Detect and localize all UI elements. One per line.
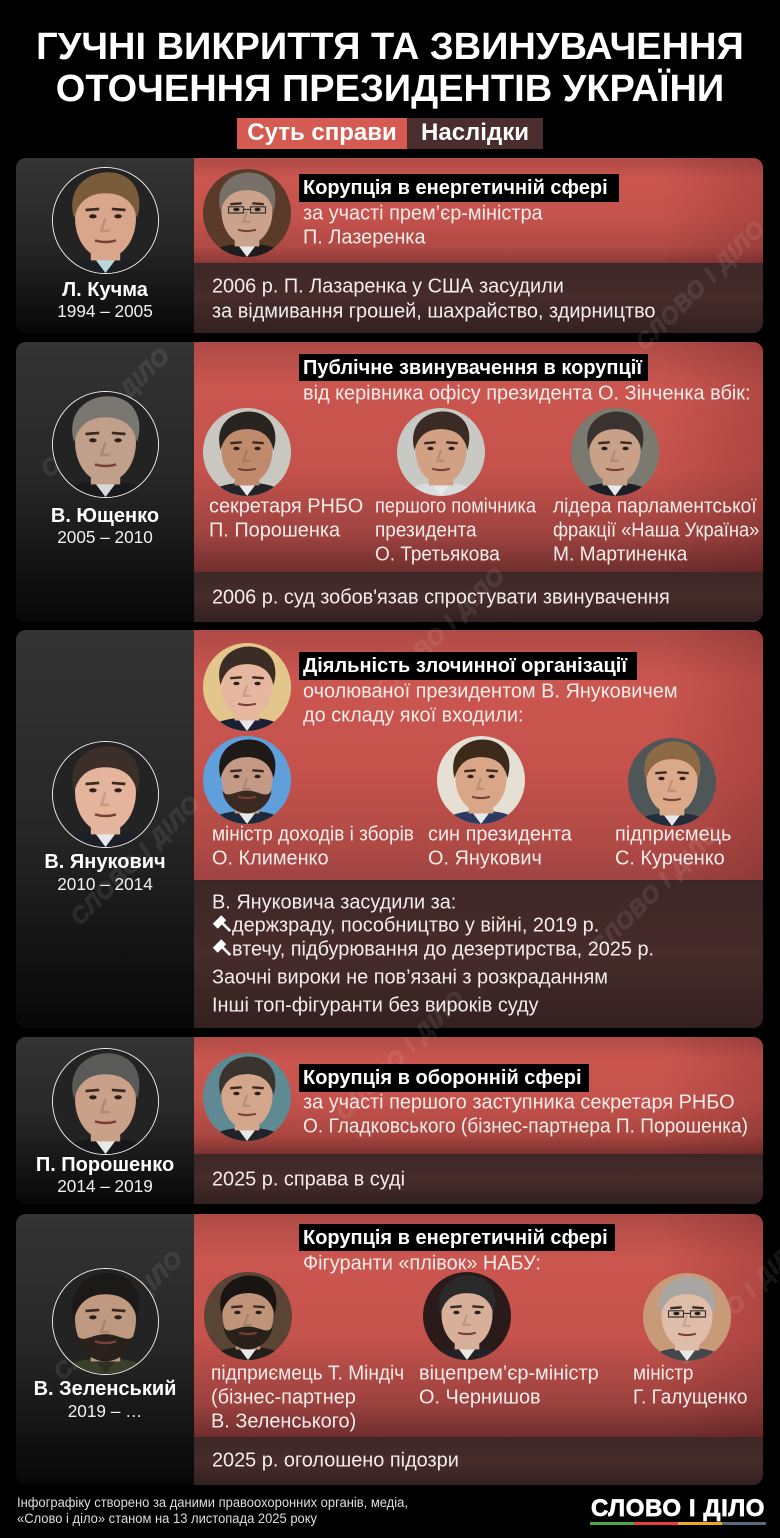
- figure: Галущенко line 2: Г. Галущенко: [633, 1386, 747, 1408]
- portrait: О. Клименко: [203, 736, 291, 824]
- footer source note: [17, 1495, 408, 1526]
- footer source note: Інфографіку створено за даними правоохоронних органів, медіа,: [17, 1495, 408, 1510]
- title: ОТОЧЕННЯ ПРЕЗИДЕНТІВ УКРАЇНИ: [56, 68, 724, 110]
- watermark: СЛОВО І ДІЛО: [330, 985, 470, 1125]
- portrait: О. Гладковський: [203, 1053, 291, 1141]
- consequence: Порошенко: 2025 р. справа в суді: [212, 1168, 405, 1190]
- figure: Курченко line 1: підприємець: [615, 824, 731, 846]
- figure: Порошенко line 2: П. Порошенка: [209, 520, 340, 542]
- case heading: Ющенко: Публічне звинувачення в корупції: [303, 356, 642, 378]
- years: Ющенко: 2005 – 2010: [57, 527, 153, 547]
- portrait: Л. Кучма: [52, 167, 159, 274]
- figure: Міндіч line 1: підприємець Т. Міндіч: [211, 1362, 404, 1384]
- case heading: Порошенко: Корупція в оборонній сфері: [303, 1067, 582, 1089]
- footer source note: «Слово і діло» станом на 13 листопада 2025 року: [17, 1511, 317, 1526]
- case text: Лазаренко: П. Лазеренка: [303, 226, 426, 248]
- legend item: наслідки: [407, 118, 543, 149]
- legend item: суть справи: Суть справи: [247, 119, 397, 146]
- name: Л. Кучма: Л. Кучма: [62, 279, 148, 301]
- consequence: Зеленський: 2025 р. оголошено підозри: [212, 1450, 459, 1472]
- portrait: П. Лазаренко: [203, 169, 291, 257]
- figure: О. Янукович line 2: О. Янукович: [428, 848, 542, 870]
- name: В. Ющенко: В. Ющенко: [51, 505, 159, 527]
- case heading: Кучма: Корупція в енергетичній сфері: [303, 177, 608, 199]
- consequence: інші фігуранти: Інші топ-фігуранти без вироків суду: [212, 994, 539, 1016]
- figure: Чернишов line 1: віцепрем’єр-міністр: [419, 1362, 599, 1384]
- portrait: О. Чернишов: [423, 1272, 511, 1360]
- figure: Чернишов line 2: О. Чернишов: [419, 1386, 541, 1408]
- watermark: СЛОВО І ДІЛО: [65, 790, 205, 930]
- portrait: П. Порошенко main: [52, 1048, 159, 1155]
- years: Зеленський: 2019 – …: [68, 1401, 142, 1421]
- watermark: СЛОВО І ДІЛО: [370, 562, 510, 702]
- watermark: СЛОВО І ДІЛО: [48, 1245, 188, 1385]
- figure: Клименко line 1: міністр доходів і зборів: [212, 824, 414, 846]
- name: В. Янукович: В. Янукович: [44, 851, 166, 873]
- consequence: державна зрада: держзраду, пособництво у війні, 2019 р.: [232, 914, 599, 936]
- figure: Курченко line 2: С. Курченко: [615, 848, 725, 870]
- figure: Мартиненко line 1: лідера парламентської: [553, 496, 757, 518]
- icon: gavel: [212, 915, 232, 932]
- figure: Порошенко line 1: секретаря РНБО: [209, 496, 363, 518]
- case text: Кучма: за участі прем’єр-міністра: [303, 202, 543, 224]
- consequence: заочні вироки: Заочні вироки не пов’язані з розкраданням: [212, 966, 608, 988]
- legend: [237, 118, 543, 149]
- portrait: В. Ющенко: [52, 391, 159, 498]
- case text: Порошенко line 2: О. Гладковського (бізнес-партнера П. Порошенка): [303, 1116, 748, 1138]
- portrait: В. Зеленський: [52, 1268, 159, 1375]
- case text: Зеленський: Фігуранти «плівок» НАБУ:: [303, 1252, 541, 1274]
- case heading: Зеленський: Корупція в енергетичній сфері: [303, 1226, 608, 1248]
- case text: Порошенко line 1: за участі першого заступника секретаря РНБО: [303, 1092, 735, 1114]
- figure: Галущенко line 1: міністр: [633, 1362, 693, 1384]
- portrait: В. Янукович: [52, 741, 159, 848]
- figure: О. Янукович line 1: син президента: [428, 824, 572, 846]
- watermark: СЛОВО І ДІЛО: [630, 215, 770, 355]
- portrait: Т. Міндіч: [204, 1272, 292, 1360]
- panel: Зеленський background: [16, 1214, 763, 1485]
- figure: Третьяков line 2: президента: [375, 520, 477, 542]
- watermark: СЛОВО І ДІЛО: [585, 820, 725, 960]
- legend item: наслідки: Наслідки: [421, 119, 529, 146]
- consequence: втеча: втечу, підбурювання до дезертирства, 2025 р.: [232, 938, 654, 960]
- name: В. Зеленський: В. Зеленський: [34, 1378, 176, 1400]
- case text: Ющенко: від керівника офісу президента О. Зінченка вбік:: [303, 382, 751, 404]
- figure: Третьяков line 1: першого помічника: [375, 496, 536, 518]
- title: ГУЧНІ ВИКРИТТЯ ТА ЗВИНУВАЧЕННЯ: [36, 26, 744, 68]
- panel: Порошенко background: [16, 1037, 763, 1204]
- title: [36, 26, 744, 110]
- figure: Міндіч line 2: (бізнес-партнер: [211, 1386, 356, 1408]
- figure: Клименко line 2: О. Клименко: [212, 848, 329, 870]
- panel: Кучма background: [16, 158, 763, 333]
- consequence: Ющенко: 2006 р. суд зобов'язав спростувати звинувачення: [212, 586, 670, 608]
- figure: Мартиненко line 3: М. Мартиненка: [553, 544, 687, 566]
- name: П. Порошенко: П. Порошенко: [36, 1154, 174, 1176]
- years: Кучма: 1994 – 2005: [57, 301, 153, 321]
- portrait: В. Янукович small: [203, 643, 291, 731]
- panel: Ющенко background: [16, 342, 763, 622]
- watermark: СЛОВО І ДІЛО: [35, 342, 175, 482]
- case text: Янукович line 1: очолюваної президентом В. Януковичем: [303, 680, 678, 702]
- panel: Янукович background: [16, 630, 763, 1028]
- portrait: С. Курченко: [628, 738, 716, 826]
- portrait: О. Третьяков: [397, 408, 485, 496]
- logo: Слово і діло: СЛОВО І ДІЛО: [591, 1495, 765, 1522]
- figure: Міндіч line 3: В. Зеленського): [211, 1410, 356, 1432]
- consequence: Кучма line 1: 2006 р. П. Лазаренка у США засудили: [212, 276, 564, 298]
- figure: Третьяков line 3: О. Третьякова: [375, 544, 500, 566]
- portrait: П. Порошенко: [203, 408, 291, 496]
- years: Порошенко: 2014 – 2019: [57, 1176, 153, 1196]
- portrait: О. Янукович: [437, 736, 525, 824]
- consequence: Кучма line 2: за відмивання грошей, шахрайство, здирництво: [212, 300, 656, 322]
- figure: Мартиненко line 2: фракції «Наша Україна»: [553, 520, 759, 542]
- portrait: Г. Галущенко: [643, 1273, 731, 1361]
- icon: gavel: [212, 939, 232, 956]
- years: Янукович: 2010 – 2014: [57, 874, 153, 894]
- case text: Янукович line 2: до складу якої входили:: [303, 704, 524, 726]
- portrait: М. Мартиненко: [571, 408, 659, 496]
- case heading: Янукович: Діяльність злочинної організації: [303, 655, 627, 677]
- consequence: Янукович intro: В. Януковича засудили за:: [212, 892, 456, 914]
